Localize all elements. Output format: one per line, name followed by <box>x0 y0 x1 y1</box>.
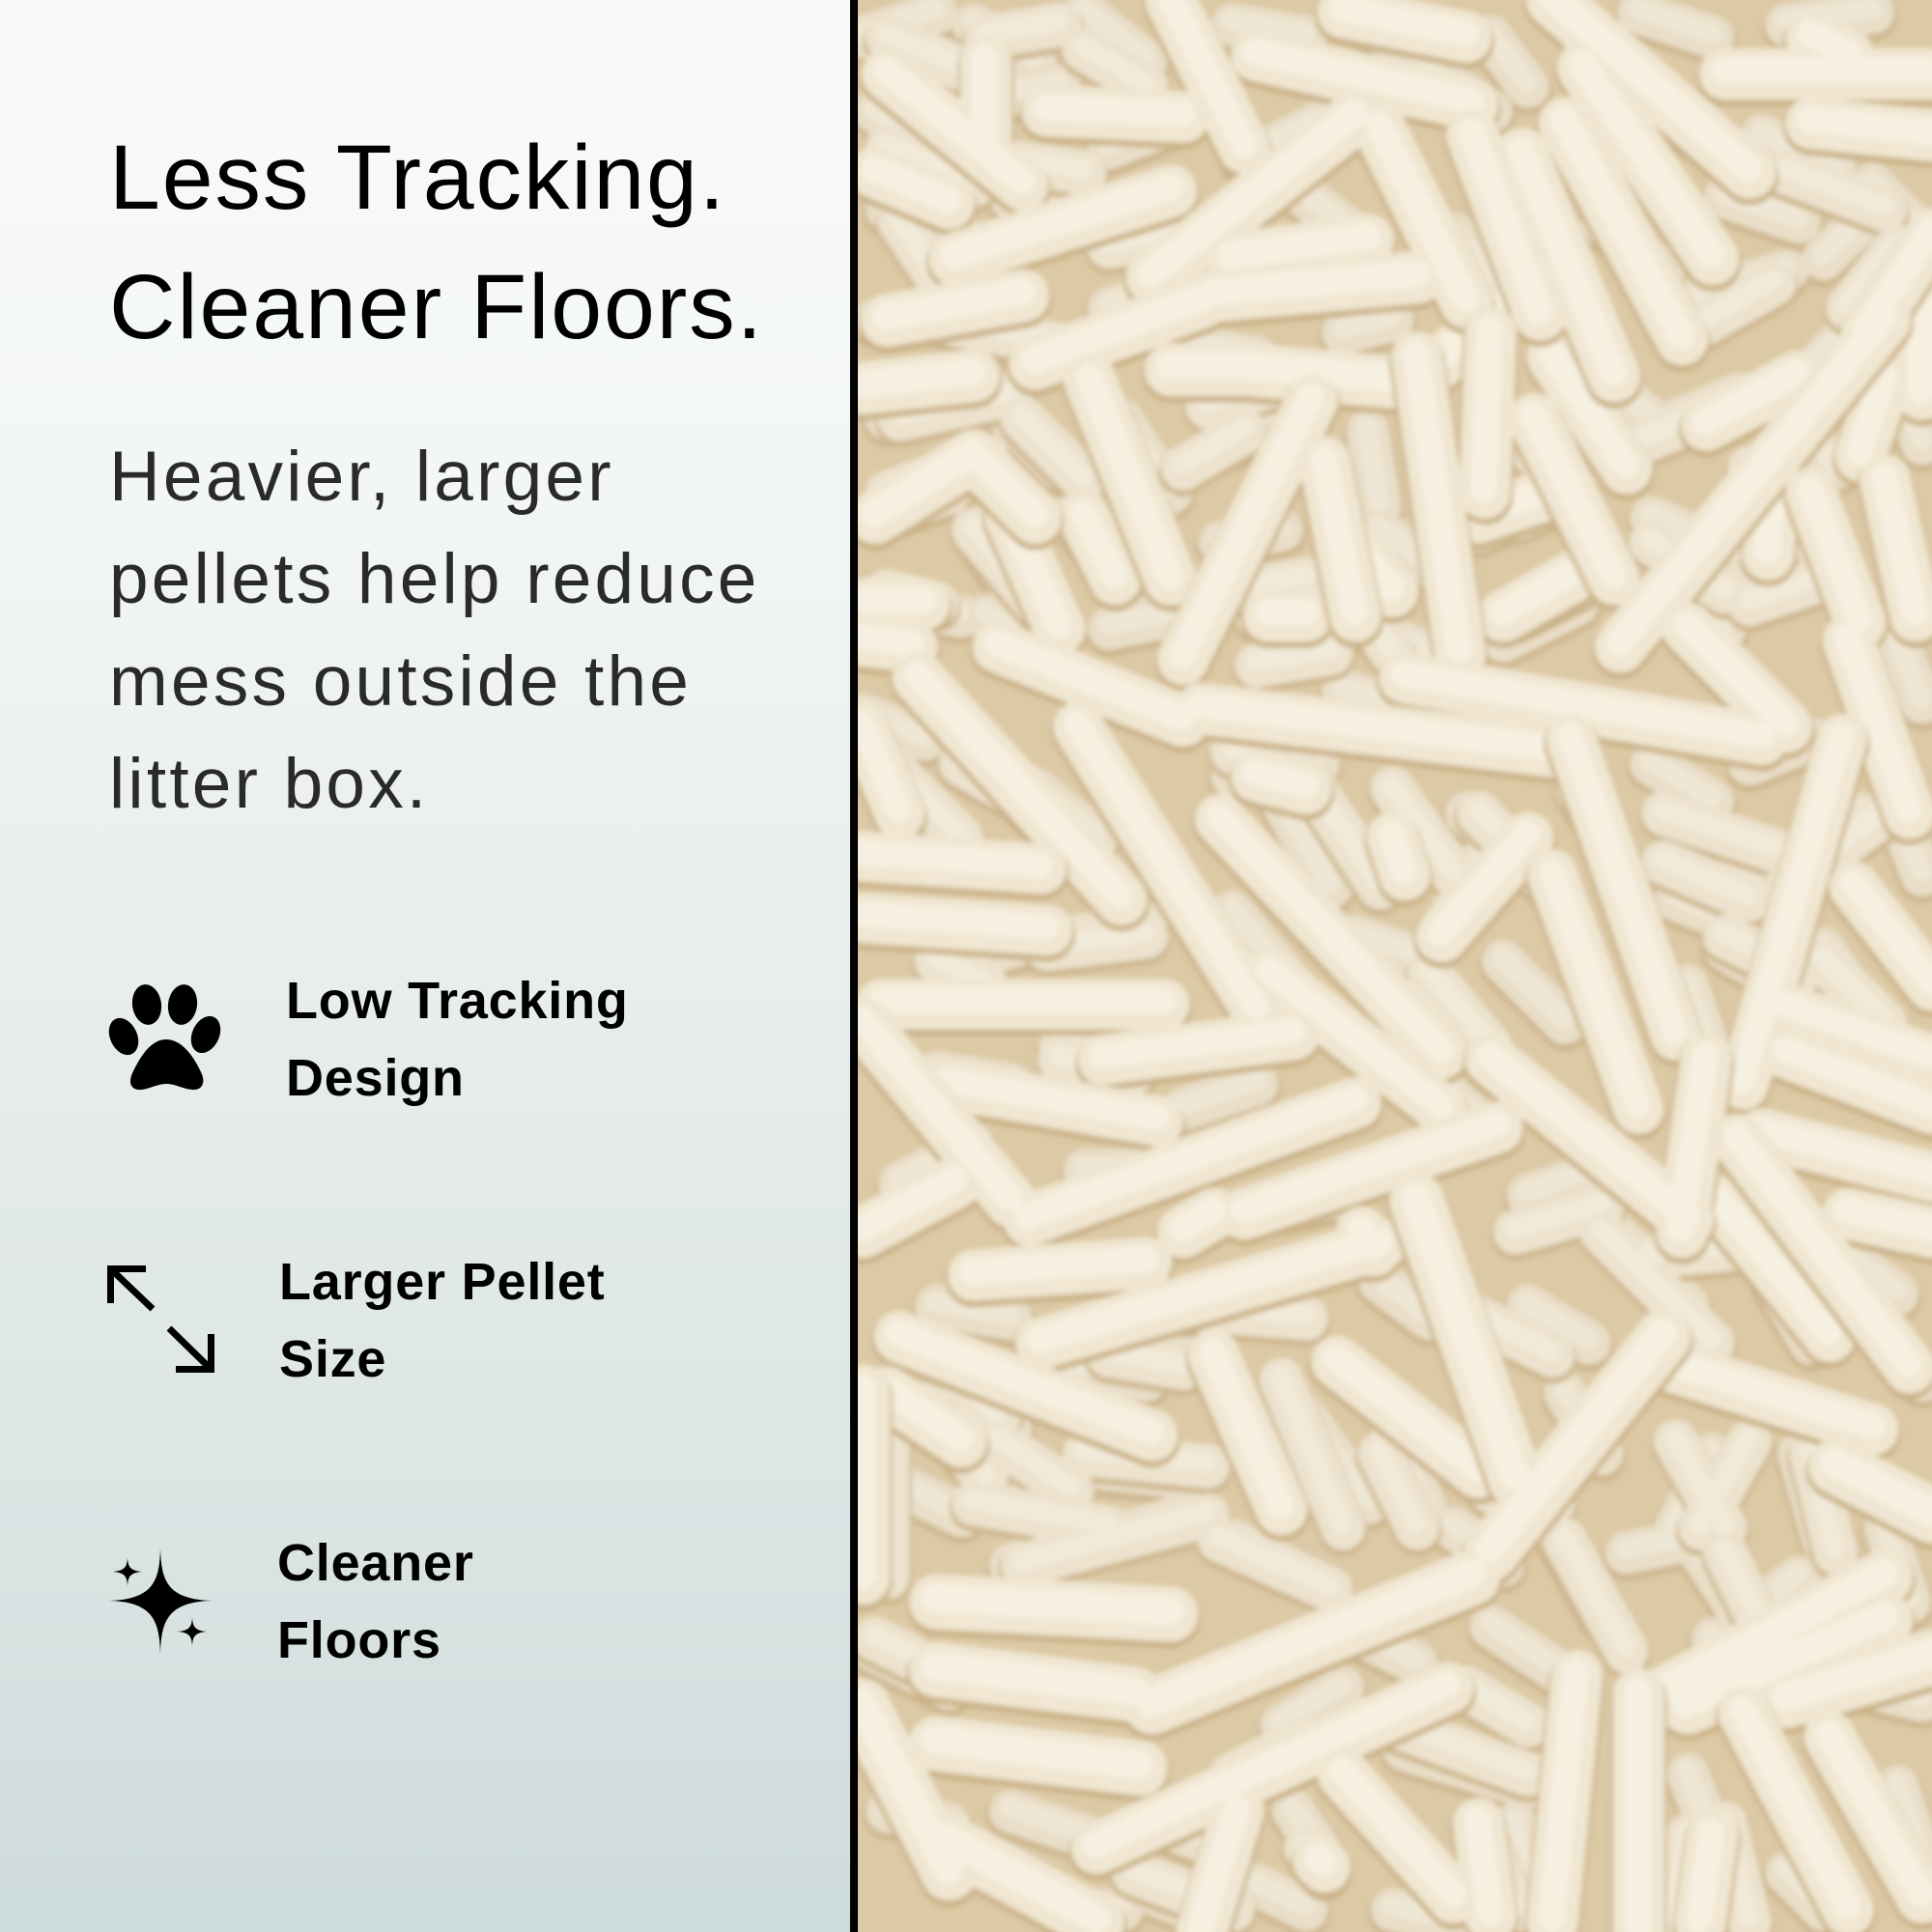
heading: Cleaner Floors. <box>109 256 764 358</box>
body text: litter box. <box>109 745 429 823</box>
heading <box>109 127 764 358</box>
heading: Less Tracking. <box>109 127 726 229</box>
panel: text column with gradient <box>0 0 850 1932</box>
label: low tracking design: Design <box>286 1049 465 1107</box>
label: low tracking design: Low Tracking <box>286 972 629 1030</box>
label: low tracking design <box>286 972 629 1107</box>
label: larger pellet size: Larger Pellet <box>279 1253 606 1311</box>
label: cleaner floors: Floors <box>277 1611 441 1669</box>
icon: sparkles <box>108 1549 213 1654</box>
label: cleaner floors <box>277 1534 474 1669</box>
icon: paw print <box>108 984 220 1090</box>
divider bar <box>850 0 858 1932</box>
body text: Heavier, larger <box>109 438 614 516</box>
body text <box>109 438 760 823</box>
body text: pellets help reduce <box>109 540 760 618</box>
label: larger pellet size <box>279 1253 606 1388</box>
body text: mess outside the <box>109 642 692 721</box>
photo: close-up of pale pellets <box>858 0 1932 1932</box>
pellet gaps background <box>858 0 1932 1932</box>
icon: diagonal resize arrows <box>107 1265 214 1373</box>
label: larger pellet size: Size <box>279 1330 386 1388</box>
label: cleaner floors: Cleaner <box>277 1534 474 1592</box>
pellet layers <box>862 0 1932 1932</box>
